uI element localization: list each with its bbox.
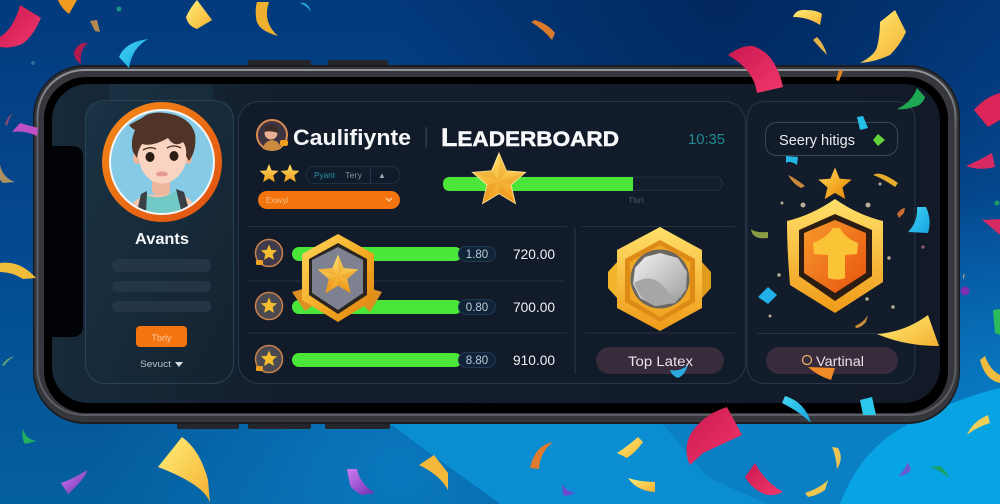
orange button [136,326,187,347]
name: Avants [135,231,189,248]
phone frame [33,65,960,424]
row 1 [256,240,555,266]
decorative sparkle dots [768,182,925,318]
row 1: 720.00 [513,246,555,262]
row 2: 700.00 [513,299,555,315]
panel: profile [85,84,234,384]
tab pill: Tery [345,170,363,180]
icon: shield badge [787,199,883,313]
orange button: Tbrly [152,333,172,343]
search box: Seery hitigs [779,132,855,149]
avatar [102,102,222,222]
placeholder lines [112,259,211,312]
row 3: 8.80 [466,355,488,367]
heading: LEADERBOARD [441,124,619,152]
row 2 [256,292,555,320]
button: top latex [596,347,724,374]
row 2: 0.80 [466,302,488,314]
left notch [44,146,83,337]
button: vartinal: Vartinal [816,353,864,369]
tab pill: ▲ [378,171,386,180]
player avatar small [257,120,288,150]
icon: small star [818,168,852,199]
player name: Caulifiynte [293,125,411,150]
rating stars [259,164,300,182]
button: vartinal [766,347,898,374]
button: top latex: Top Latex [628,354,693,369]
row 1: 1.80 [466,249,488,261]
icon: star medal [292,234,382,322]
orange select [258,191,400,209]
clock: 10:35 [688,132,725,148]
main progress bar [443,153,722,205]
panel: leaderboard [238,102,746,384]
tab pill [306,166,400,184]
dividers [248,226,735,374]
icon: silver medal [608,227,711,331]
row 3 [256,346,555,372]
panel: rewards [747,102,925,384]
orange select: Exavyl [266,195,288,205]
phone side buttons [177,60,390,429]
main progress bar: Tlsrt [628,196,645,205]
dropdown label [140,359,183,370]
search box [766,122,898,156]
dropdown label: Sevuct [140,359,171,370]
row 3: 910.00 [513,352,555,368]
tab pill: Pyant [314,170,336,180]
